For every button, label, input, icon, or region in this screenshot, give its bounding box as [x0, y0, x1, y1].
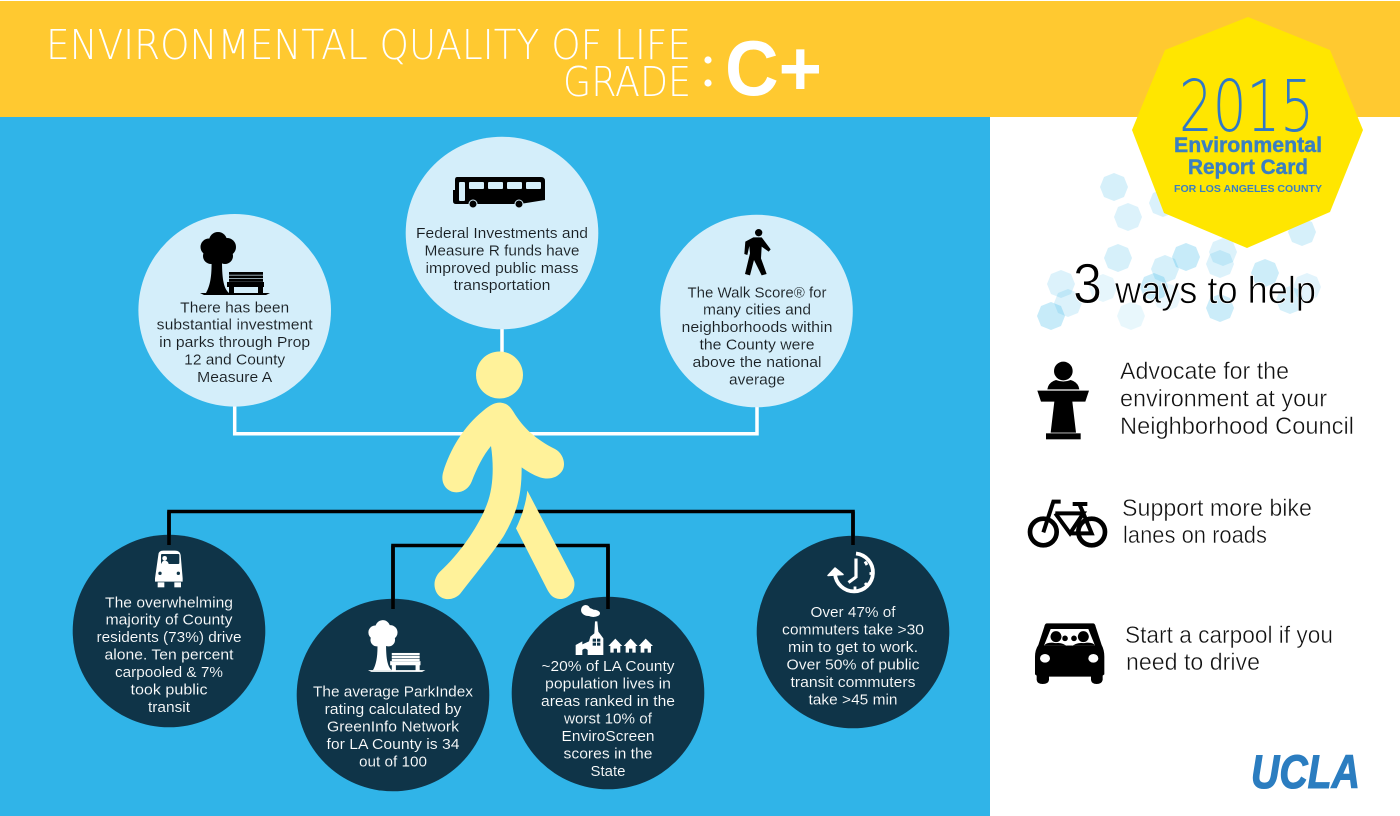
badge title: Environmental: [1174, 134, 1322, 157]
grade colon: [704, 56, 712, 87]
text: walk score: many cities and: [703, 302, 811, 319]
panel: commuting alone: [73, 512, 265, 727]
text: ParkIndex rating: GreenInfo Network: [327, 718, 460, 736]
text: public transportation: Measure R funds have: [424, 242, 580, 260]
icon: bus: [453, 177, 545, 208]
text: EnviroScreen: ~20% of LA County: [542, 658, 675, 675]
heading: 3 ways to help: [1073, 252, 1316, 316]
text: EnviroScreen: [541, 658, 675, 780]
icon: factory and houses: [576, 605, 653, 655]
text: commute times: take >45 min: [808, 692, 898, 708]
text: commuting alone: alone. Ten percent: [104, 646, 234, 664]
text: carpool: Start a carpool if you: [1125, 622, 1333, 649]
panel: blue main area: [0, 117, 990, 816]
text: ParkIndex rating: out of 100: [359, 754, 427, 770]
badge title: FOR LOS ANGELES COUNTY: [1174, 183, 1322, 195]
text: commute times: Over 50% of public: [786, 656, 920, 674]
text: commuting alone: residents (73%) drive: [96, 629, 242, 646]
text: commute times: Over 47% of: [810, 604, 896, 621]
text: walk score: above the national: [692, 354, 822, 371]
panel: commute times: [757, 512, 949, 728]
text: parks investment: substantial investment: [157, 317, 314, 334]
action: carpool: [1035, 622, 1333, 684]
header band: [0, 1, 1400, 117]
badge title: [1174, 134, 1322, 195]
text: commuting alone: majority of County: [106, 612, 233, 629]
icon: car with driver: [155, 551, 183, 587]
text: bike lanes: lanes on roads: [1123, 522, 1267, 549]
title: GRADE: [563, 58, 691, 106]
text: commuting alone: carpooled & 7%: [115, 664, 223, 681]
text: EnviroScreen: EnviroScreen: [562, 728, 654, 745]
text: carpool: need to drive: [1126, 649, 1260, 676]
text: walk score: average: [729, 372, 785, 388]
text: EnviroScreen: areas ranked in the: [541, 693, 675, 710]
text: commute times: commuters take >30: [782, 622, 924, 638]
text: walk score: [682, 284, 832, 388]
text: public transportation: Federal Investments and: [416, 225, 588, 242]
badge year: 2015: [1179, 65, 1314, 148]
panel: EnviroScreen: [512, 546, 704, 789]
logo: UCLA: UCLA: [1251, 745, 1360, 798]
action: bike lanes: [1030, 495, 1312, 549]
badge: 2015 Environmental Report Card: [1132, 17, 1363, 248]
black connector lines: [169, 512, 853, 609]
text: walk score: neighborhoods within: [682, 319, 832, 336]
walking figure: [435, 352, 574, 599]
text: commute times: transit commuters: [790, 674, 916, 691]
text: parks investment: Measure A: [197, 369, 272, 386]
icon: bicycle: [1030, 502, 1105, 545]
text: commute times: [782, 604, 924, 708]
icon: podium: [1037, 362, 1089, 439]
text: public transportation: [416, 225, 588, 294]
title: [46, 21, 691, 106]
badge title: Report Card: [1188, 156, 1308, 179]
title: ENVIRONMENTAL QUALITY OF LIFE: [46, 21, 691, 69]
text: bike lanes: [1122, 495, 1312, 549]
action: advocate: [1037, 358, 1354, 440]
text: public transportation: improved public mass: [426, 260, 578, 277]
text: advocate: Neighborhood Council: [1120, 413, 1354, 440]
text: ParkIndex rating: for LA County is 34: [326, 736, 460, 753]
panel: public transportation: [406, 137, 598, 329]
panel: parks investment: [138, 214, 331, 407]
text: walk score: the County were: [700, 336, 814, 354]
text: advocate: [1120, 358, 1354, 440]
text: advocate: Advocate for the: [1120, 358, 1289, 385]
text: EnviroScreen: State: [590, 763, 626, 780]
text: ParkIndex rating: [313, 684, 474, 770]
text: commuting alone: The overwhelming: [105, 594, 233, 611]
text: parks investment: 12 and County: [184, 352, 286, 368]
text: parks investment: in parks through Prop: [159, 334, 310, 351]
text: parks investment: There has been: [180, 299, 289, 316]
white connector lines: [235, 323, 757, 434]
text: parks investment: [157, 299, 314, 386]
panel: walk score: [660, 215, 853, 407]
text: ParkIndex rating: The average ParkIndex: [313, 684, 474, 701]
text: commuting alone: took public: [130, 682, 208, 698]
text: walk score: The Walk Score® for: [688, 284, 826, 301]
decorative bubbles: [1037, 173, 1321, 330]
text: EnviroScreen: worst 10% of: [563, 710, 653, 728]
text: EnviroScreen: population lives in: [545, 676, 671, 692]
icon: clock with arrow: [828, 554, 874, 591]
heading: 3 ways to help: 3: [1073, 252, 1102, 316]
text: commuting alone: [96, 594, 242, 716]
text: bike lanes: Support more bike: [1122, 495, 1312, 522]
icon: tree and bench: [200, 232, 270, 295]
icon: car with passengers: [1035, 623, 1104, 684]
grade value: C+: [725, 24, 822, 112]
heading: 3 ways to help: ways to help: [1114, 270, 1316, 312]
text: commuting alone: transit: [148, 699, 191, 716]
text: advocate: environment at your: [1120, 386, 1327, 412]
text: ParkIndex rating: rating calculated by: [324, 701, 462, 718]
text: carpool: [1125, 622, 1333, 676]
icon: pedestrian: [744, 229, 771, 275]
icon: tree and bench: [368, 620, 425, 672]
text: EnviroScreen: scores in the: [564, 746, 652, 762]
panel: ParkIndex rating: [297, 546, 489, 791]
text: commute times: min to get to work.: [788, 639, 918, 656]
text: public transportation: transportation: [454, 277, 550, 294]
